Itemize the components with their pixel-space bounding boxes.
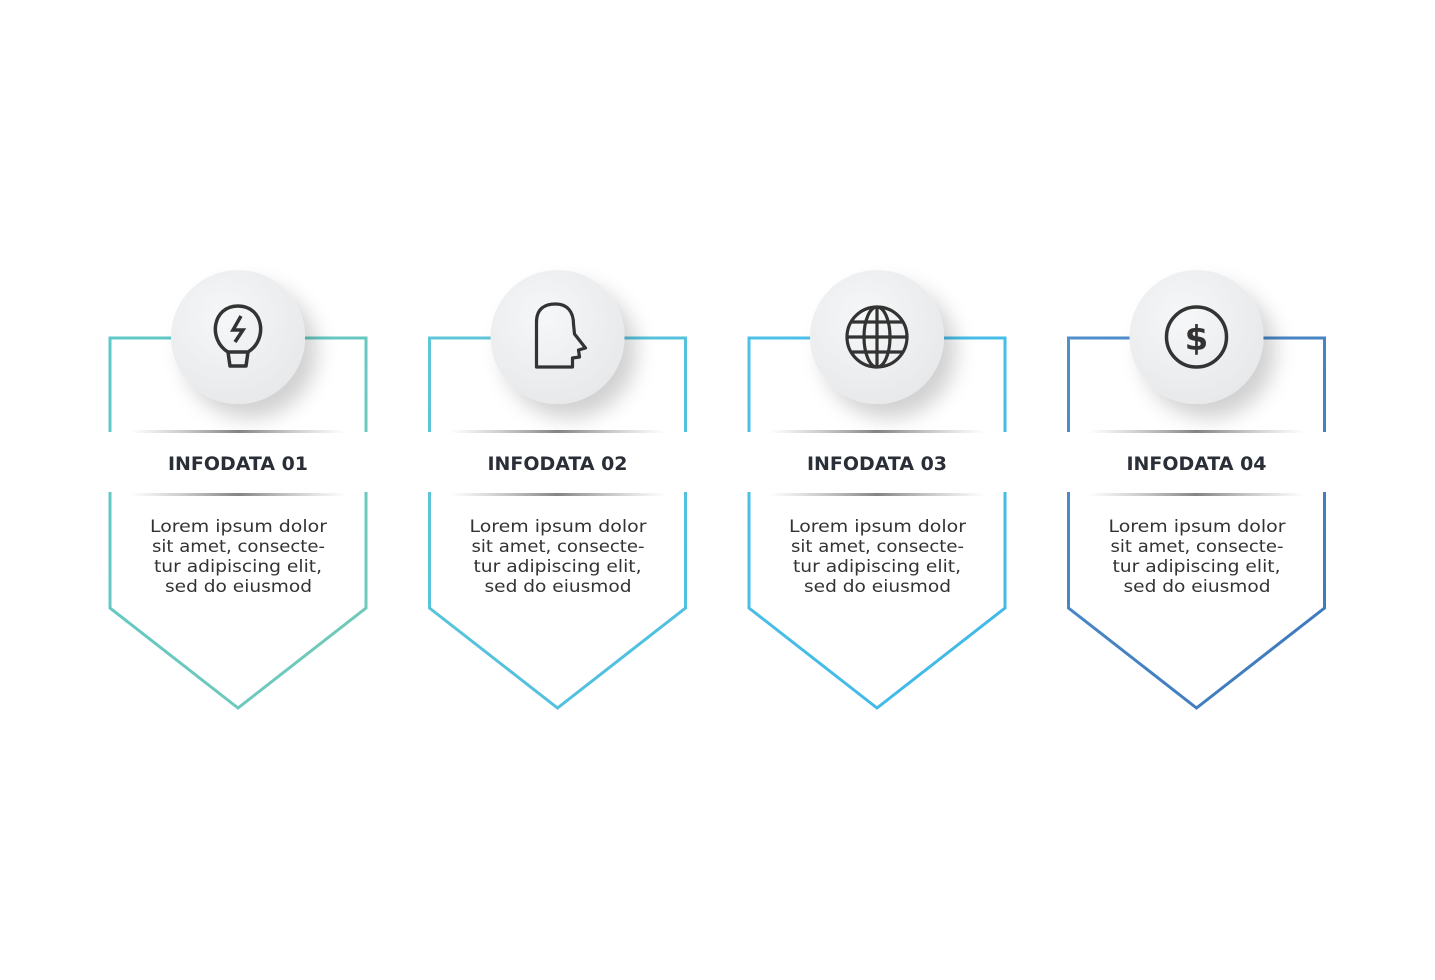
icon circle: light bulb <box>171 270 305 404</box>
text block: sit amet, consecte- <box>472 537 644 557</box>
text block: sed do eiusmod <box>484 577 632 597</box>
text block: tur adipiscing elit, <box>474 557 641 577</box>
text block: Lorem ipsum dolor <box>470 517 647 537</box>
heading: INFODATA 02 <box>488 453 628 475</box>
panel: infodata 02 <box>430 270 686 708</box>
text block: sit amet, consecte- <box>791 537 964 557</box>
text block: sed do eiusmod <box>1124 577 1270 597</box>
icon circle: dollar <box>1130 270 1264 404</box>
text block: tur adipiscing elit, <box>1112 557 1280 577</box>
text block: Lorem ipsum dolor <box>150 517 327 537</box>
text block: sed do eiusmod <box>165 577 312 597</box>
text block: sit amet, consecte- <box>152 537 325 557</box>
frame <box>749 338 1005 708</box>
text block: Lorem ipsum dolor <box>1108 517 1286 537</box>
text block: sed do eiusmod <box>804 577 951 597</box>
panel: infodata 03 <box>749 270 1005 708</box>
text block: Lorem ipsum dolor <box>789 517 966 537</box>
frame <box>430 338 686 708</box>
panel: infodata 04 <box>1068 270 1324 708</box>
icon circle: dollar: $ <box>1185 319 1208 359</box>
text block: tur adipiscing elit, <box>154 557 322 577</box>
text block: sit amet, consecte- <box>1110 537 1284 557</box>
heading: INFODATA 04 <box>1126 453 1266 475</box>
icon circle: head <box>490 270 624 404</box>
heading: INFODATA 03 <box>807 453 947 475</box>
icon circle: globe <box>810 270 944 404</box>
frame <box>110 338 366 708</box>
panel: infodata 01 <box>110 270 366 708</box>
frame <box>1068 338 1324 708</box>
text block: tur adipiscing elit, <box>793 557 961 577</box>
heading: INFODATA 01 <box>168 453 308 475</box>
